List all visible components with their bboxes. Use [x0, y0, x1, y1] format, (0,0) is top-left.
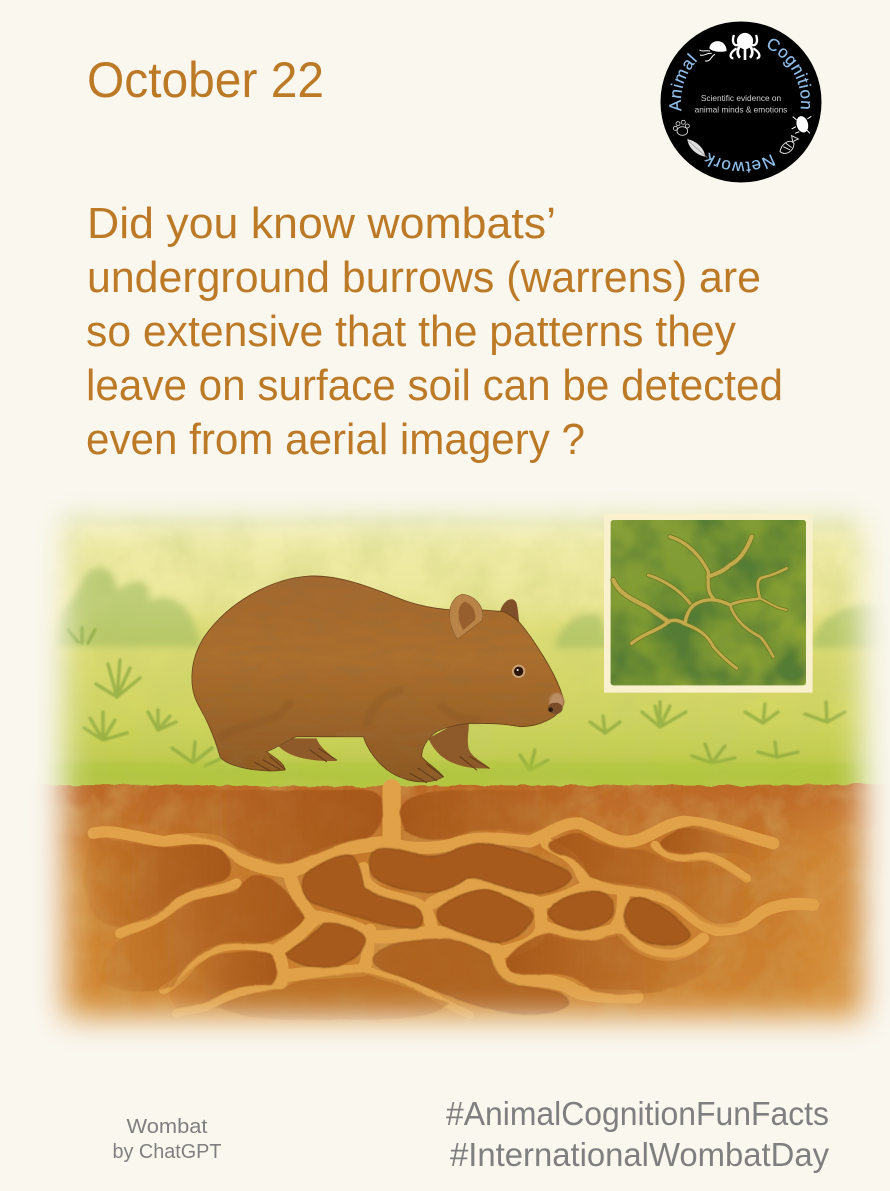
icon: octopus	[731, 33, 759, 60]
question text block: even from aerial imagery ?	[86, 415, 585, 464]
icon: beetle	[792, 115, 811, 134]
wombat	[192, 576, 564, 783]
soil edge glow	[73, 808, 855, 998]
question text block: underground burrows (warrens) are	[87, 253, 761, 302]
inset cream frame	[604, 513, 813, 693]
hashtags: #AnimalCognitionFunFacts	[446, 1095, 829, 1132]
icon: fish	[780, 136, 798, 153]
date heading: October 22	[87, 52, 324, 108]
wombat left ear	[450, 594, 483, 639]
logo tagline	[695, 93, 787, 114]
illustration scene	[39, 502, 886, 1042]
wombat snout	[548, 693, 564, 714]
inset green map	[611, 520, 806, 685]
burrow tunnel network	[93, 788, 813, 1015]
icon: feather	[687, 139, 707, 158]
soil cavities between tunnels	[83, 790, 759, 1020]
logo tagline: Scientific evidence on	[701, 93, 782, 103]
logo ring text: Network	[704, 152, 776, 173]
inset: aerial view of burrow patterns	[604, 513, 813, 693]
logo ring text: Animal	[669, 52, 698, 112]
logo tagline: animal minds & emotions	[695, 104, 787, 114]
wombat eye	[512, 665, 525, 678]
wombat toes	[255, 748, 489, 783]
inset aerial tunnels	[613, 537, 787, 668]
image credit	[112, 1116, 222, 1163]
soil cross-section	[40, 783, 886, 1042]
question text block: so extensive that the patterns they	[86, 307, 736, 356]
wombat body shading	[218, 690, 480, 740]
wombat body	[192, 576, 564, 782]
icon: jellyfish	[699, 41, 727, 61]
image credit: Wombat	[126, 1116, 208, 1138]
image credit: by ChatGPT	[112, 1141, 222, 1163]
question text block: leave on surface soil can be detected	[86, 361, 783, 410]
logo: Animal Cognition Network badge	[660, 22, 822, 182]
icon: paw	[673, 120, 689, 135]
hashtags: #InternationalWombatDay	[450, 1136, 829, 1173]
logo ring text	[669, 38, 812, 173]
meadow background	[40, 504, 886, 788]
distant bushes	[57, 520, 874, 650]
wombat far legs	[273, 717, 490, 768]
wombat ear right	[500, 599, 519, 622]
hashtags	[446, 1095, 829, 1173]
logo ring text: Cognition	[768, 38, 812, 109]
question text block: Did you know wombats’	[87, 199, 556, 248]
question text block	[86, 199, 783, 464]
grass tufts	[68, 628, 845, 770]
logo animal icons	[673, 33, 811, 158]
grass strip shading	[68, 762, 856, 786]
